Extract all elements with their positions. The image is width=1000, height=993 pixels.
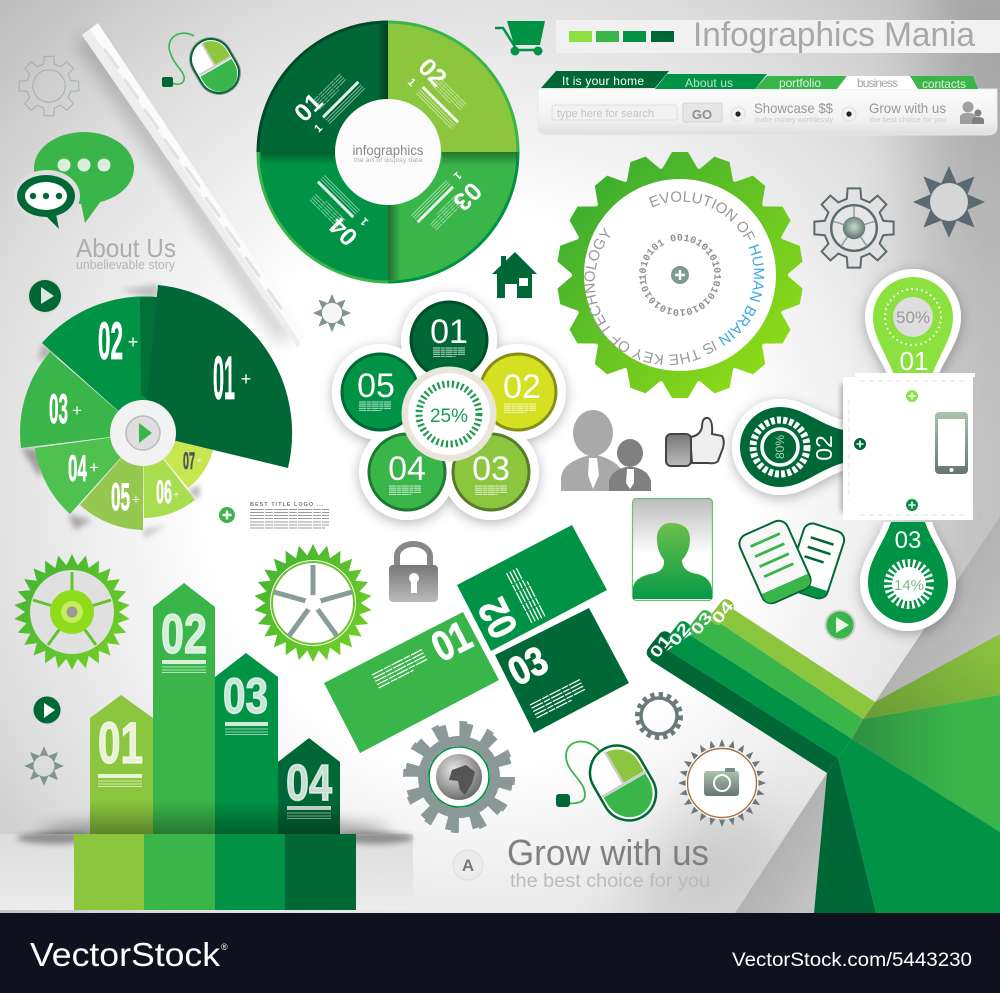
- icon: big gear with circular text: [558, 152, 802, 398]
- arrow 01: [90, 695, 153, 834]
- tab: contacts: contacts: [922, 77, 966, 91]
- radio grow: Grow with us: [869, 100, 946, 116]
- radio grow: [842, 100, 946, 124]
- icon: small gear outline: [638, 695, 680, 737]
- icon: people silhouettes: [561, 410, 651, 491]
- icon: outline gear with sphere: [814, 188, 894, 268]
- panel: title banner: Infographics Mania: [693, 16, 975, 54]
- icon: home: [492, 252, 537, 298]
- heading: Grow with us: Grow with us: [507, 832, 709, 873]
- panel: tilted rectangle 02: 02: [470, 591, 527, 645]
- arrow 04: 04: [286, 754, 333, 811]
- diagonal white ruler strip: [76, 23, 305, 348]
- icon: small gray sun: [24, 746, 64, 786]
- petal 03: [453, 434, 529, 510]
- tab: business: business: [857, 76, 898, 90]
- radio grow: the best choice for you: [870, 117, 946, 124]
- pin 01: 50%: [896, 308, 930, 327]
- quadrant 02 label: [405, 53, 471, 129]
- fan segment labels: 05: [111, 476, 130, 519]
- tab: business: [837, 76, 918, 90]
- heading: Grow with us: the best choice for you: [510, 871, 710, 892]
- icon: mouse bottom: [556, 736, 666, 830]
- quadrant 03 label: 1: [451, 169, 464, 182]
- GO button: [683, 103, 722, 122]
- arrow 01: 01: [98, 711, 143, 776]
- quadrant 04 label: 04: [324, 211, 363, 251]
- centre plus: [671, 266, 689, 284]
- panel: tilted rectangle 03: 03: [501, 638, 555, 695]
- tab: contacts: [910, 76, 978, 91]
- icon: green gear with hub: [14, 554, 130, 670]
- tab: About us: [655, 74, 767, 90]
- search field: [552, 105, 677, 120]
- radio showcase: Showcase $$: [754, 100, 833, 116]
- chart: four diagonal numbered strips: 01: [647, 632, 675, 662]
- icon: speech bubbles: [14, 132, 134, 229]
- icon: play button dark: [27, 278, 63, 314]
- arrow 03: [215, 653, 278, 834]
- arrow 04: [278, 738, 340, 834]
- quadrant 02 label: 1: [405, 76, 418, 89]
- plus buttons: [854, 390, 918, 511]
- panel: circular infographic four quadrants: [258, 22, 518, 282]
- binary ring: 1010101 0010101010101010101010101010101: [639, 234, 721, 316]
- icon: users: [960, 102, 984, 124]
- panel: diagonal colour fan bottom right: [814, 634, 1000, 913]
- white card: [841, 373, 975, 520]
- icon: phone: [935, 412, 968, 474]
- pin 01: 01: [900, 346, 928, 376]
- icon: dark sun: [913, 166, 985, 238]
- petal 05: 05: [357, 367, 395, 405]
- fan segment labels: 04: [68, 448, 87, 489]
- panel: tilted rectangle 01: 01: [424, 612, 479, 671]
- donut centre caption: infographics: [352, 143, 424, 158]
- icon: A button: [453, 850, 483, 880]
- radio showcase: [731, 100, 834, 124]
- pin 03: 14%: [894, 577, 924, 594]
- icon: portrait card: [632, 498, 712, 600]
- tab: It is your home: [541, 71, 669, 88]
- petal 04: [369, 434, 445, 510]
- chart: spiral fan with seven segments: +: [132, 491, 140, 507]
- panel: tilted rectangle 01: [324, 612, 499, 753]
- fan segment labels: 07: [183, 448, 195, 475]
- tab: portfolio: [755, 76, 847, 90]
- icon: camera gear: [678, 739, 766, 827]
- quadrant 04 label: 1: [358, 215, 371, 228]
- fan segment labels: 02: [98, 312, 123, 371]
- chart: four diagonal numbered strips: 04: [709, 598, 737, 628]
- icon: plus with caption lines: [219, 502, 329, 528]
- chart: base platform: [0, 820, 413, 910]
- chart: four diagonal numbered strips: 03: [688, 609, 716, 639]
- GO button: GO: [692, 107, 712, 122]
- icon: gear with globe: [404, 722, 514, 832]
- chart: spiral fan with seven segments: [20, 284, 292, 538]
- quadrant 01 label: 1: [312, 122, 325, 135]
- quadrant 01 label: 01: [289, 88, 329, 127]
- pin 02: [732, 399, 845, 495]
- chart: spiral fan with seven segments: +: [241, 369, 251, 389]
- petal 02: [480, 354, 556, 430]
- heading: About Us: unbelievable story: [76, 258, 176, 272]
- panel: navigation bar with tabs: [538, 71, 997, 135]
- panel: right cross of pins: [732, 269, 975, 631]
- tab: It is your home: It is your home: [562, 74, 644, 88]
- fan segment labels: [49, 312, 235, 519]
- icon: shopping cart: [495, 21, 545, 56]
- petal 03: 03: [472, 450, 510, 488]
- centre percentage dial: [402, 366, 496, 462]
- chart: four diagonal numbered strips: [644, 597, 875, 773]
- petal 02: 02: [503, 368, 541, 406]
- chart: spiral fan with seven segments: 01: [213, 344, 235, 412]
- icon: mouse top: [162, 32, 246, 100]
- chart: spiral fan with seven segments: +: [72, 401, 82, 420]
- circular slogan: EVOLUTION OF HUMAN BRAIN IS THE KEY OF TECHNOLOGY: [584, 191, 764, 366]
- pin 01: [865, 269, 961, 378]
- pin 03: [860, 522, 956, 631]
- petal 05: [342, 354, 418, 430]
- centre percentage dial: 25%: [430, 406, 468, 427]
- icon: thumbs up: [666, 418, 724, 466]
- chart: spiral fan with seven segments: +: [89, 458, 99, 477]
- chart: spiral fan with seven segments: +: [196, 456, 202, 467]
- icon: plus with caption lines: BEST TITLE LOGO ...: [250, 502, 324, 508]
- panel: gray corner triangles: [735, 517, 1000, 913]
- donut centre caption: the art of display data: [354, 157, 422, 164]
- icon: documents: [736, 518, 846, 606]
- quadrant 04 label: [305, 175, 371, 251]
- heading: About Us: About Us: [76, 233, 176, 263]
- chart: rising arrows: [90, 583, 340, 834]
- footer band: [0, 913, 1000, 993]
- panel: tilted rectangle 02: [457, 525, 607, 651]
- icon: green gear with spokes: [254, 544, 372, 662]
- footer band: VectorStock.com/5443230: [732, 950, 972, 971]
- quadrant 02 label: 02: [413, 53, 452, 92]
- pin 03: 03: [895, 527, 921, 554]
- arrow 02: 02: [161, 602, 207, 665]
- pin 02: 80%: [773, 435, 787, 459]
- icon: padlock: [389, 544, 438, 602]
- footer band: ®: [221, 942, 228, 952]
- petal 01: 01: [430, 313, 468, 351]
- pin 02: 02: [811, 435, 837, 461]
- panel: flower with five numbered petals: [332, 292, 566, 520]
- tab: About us: About us: [685, 76, 733, 90]
- petal 04: 04: [388, 450, 426, 488]
- panel: title banner: [556, 16, 1000, 54]
- icon: play button small: [32, 695, 62, 725]
- petal 01: [411, 302, 487, 378]
- tab: portfolio: portfolio: [779, 76, 821, 90]
- radio showcase: make money worthlessly: [755, 117, 834, 124]
- footer band: VectorStock: [30, 936, 221, 973]
- icon: small sun gear: [313, 294, 351, 332]
- icon: play button green: [824, 610, 856, 640]
- icon: A button: A: [462, 856, 474, 875]
- chart: spiral fan with seven segments: +: [128, 332, 138, 352]
- fan segment labels: 06: [156, 474, 172, 510]
- chart: four diagonal numbered strips: 02: [666, 620, 694, 650]
- panel: tilted rectangle 03: [495, 608, 629, 733]
- fan segment labels: 03: [49, 385, 68, 432]
- quadrant 03 label: 03: [448, 177, 487, 216]
- arrow 02: [153, 583, 215, 834]
- heading: Grow with us: [507, 832, 710, 892]
- arrow 03: 03: [223, 668, 268, 724]
- quadrant 01 label: [289, 69, 365, 135]
- search field: type here for search: [557, 108, 654, 120]
- chart: spiral fan with seven segments: +: [173, 490, 179, 501]
- icon: outline gear top left: [19, 56, 79, 116]
- quadrant 03 label: [411, 169, 487, 235]
